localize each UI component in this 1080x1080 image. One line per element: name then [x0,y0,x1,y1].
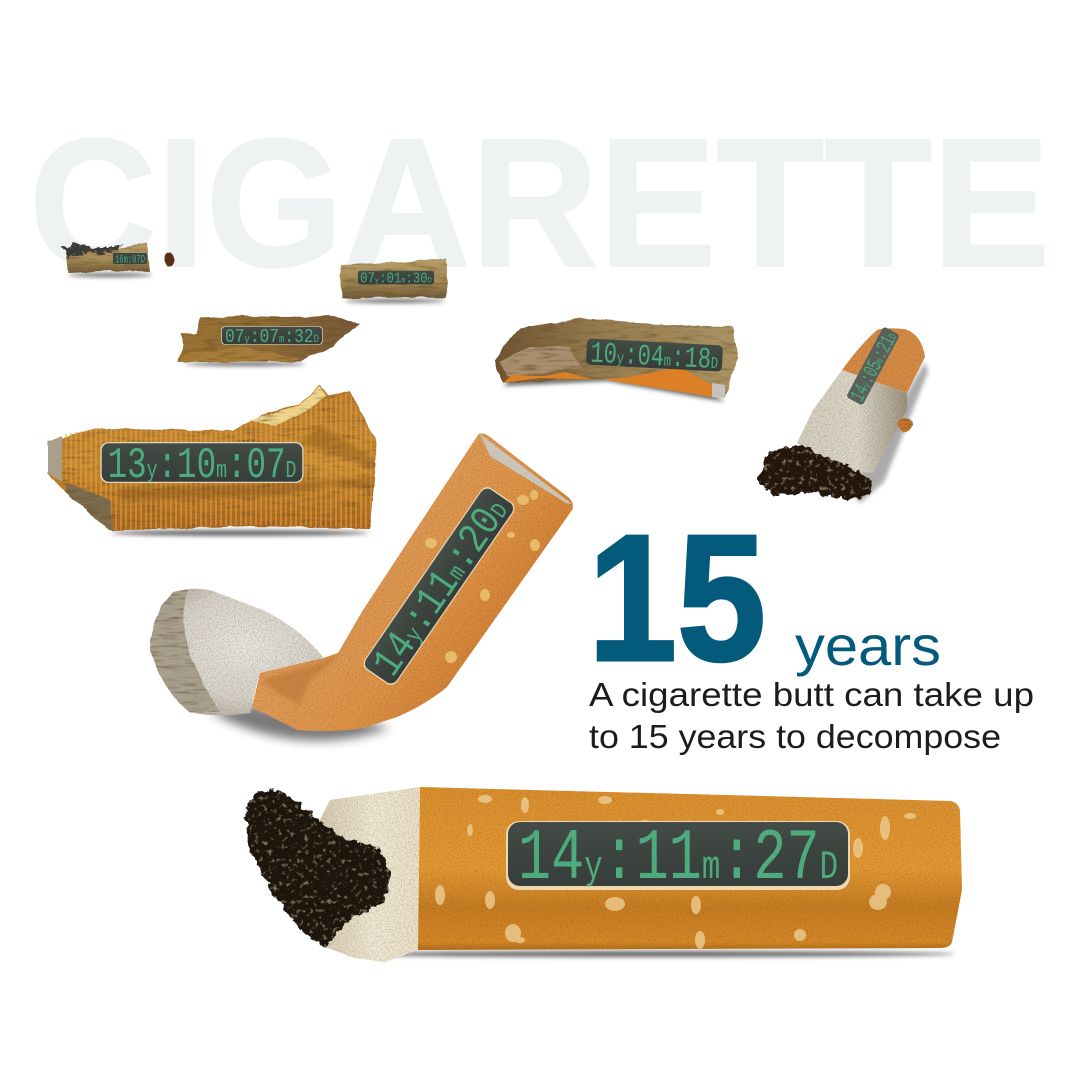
display: 07y 01m 30D: 07y:01m:30D [360,270,432,287]
speckles [435,795,916,949]
grey open end [480,434,572,504]
display: 14y 11m 20D: 14y:11m:20D [364,490,519,686]
cigarette stub: 07y 01m 30D [340,258,448,303]
caption: to 15 years to decompose [589,718,1001,755]
speckles [425,490,540,663]
cigarette stub: 10y 04m 18D [495,318,738,402]
cigarette stub: 16m 07D [62,243,174,277]
cream paper [300,787,420,962]
ash lump [150,589,323,715]
big text: 15 years [588,498,941,699]
tobacco end [757,445,873,500]
frayed pale paper edge [250,386,326,426]
charred end [245,790,390,947]
caption [589,676,1034,755]
bent cigarette butt: 14y 11m 20D [150,433,573,741]
fold shadows [118,478,372,500]
cigarette stub: 13y 10m 07D crumpled [48,385,376,536]
orange filter body [418,787,962,950]
cigarette stub: 07y 07m 32D [177,316,360,366]
cigarette butt: 14y 05m with tobacco end [757,326,928,503]
display: 13y 10m 07D: 13y:10m:07D [108,441,296,490]
display: 14y 05m 21D: 14y:05m:21D [846,328,903,406]
large cigarette: 14y 11m 27D [245,787,962,962]
caption: A cigarette butt can take up [589,676,1034,713]
display: 14y 11m 27D: 14y:11m:27D [518,818,838,900]
grey tip [48,436,62,482]
bend creases [262,655,340,705]
big text: 15 years: years [795,614,941,677]
big text: 15 years: 15 [588,498,766,699]
bent filter [252,433,573,731]
cigarette stub: 16m 07D: 16m:07D [115,254,145,266]
title: CIGARETTE watermark: CIGARETTE [29,100,1050,305]
display: 07y 07m 32D: 07y:07m:32D [225,327,319,349]
display: 10y 04m 18D: 10y:04m:18D [590,337,719,377]
orange wrapper strip [503,367,712,397]
